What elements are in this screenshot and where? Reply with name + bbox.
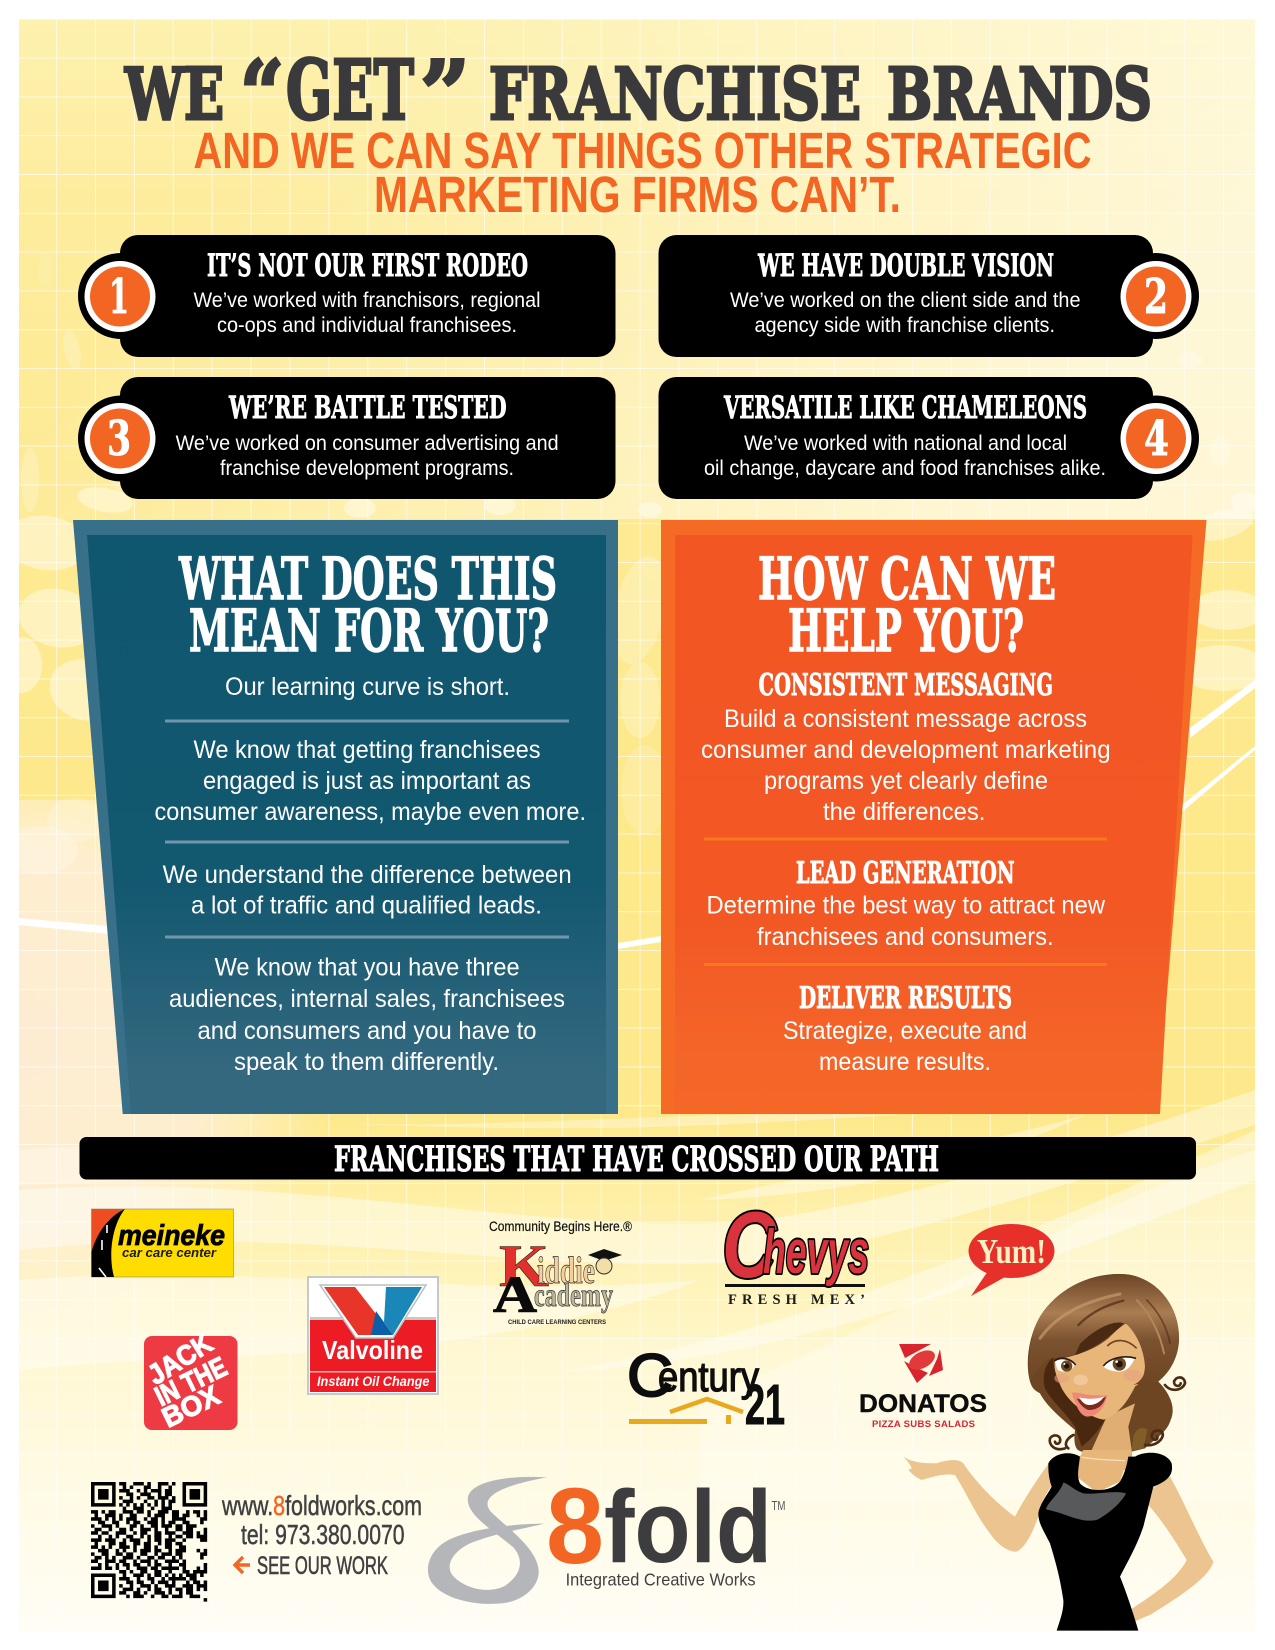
heading <box>178 545 557 665</box>
mouth <box>1072 1392 1107 1417</box>
heading: HELP YOU? <box>788 597 1024 665</box>
body text: We know that getting franchisees <box>194 736 540 764</box>
banner: franchises <box>80 1137 1196 1180</box>
panel: what does this mean for you <box>73 520 618 1114</box>
subtitle: MARKETING FIRMS CAN’T. <box>374 166 901 223</box>
logo: valvoline: Valvoline <box>322 1335 423 1365</box>
callout 3: 3 <box>107 411 131 467</box>
consistent messaging: CONSISTENT MESSAGING <box>758 667 1053 702</box>
body text: engaged is just as important as <box>203 767 531 795</box>
qr code <box>91 1482 207 1602</box>
logo: kiddie academy <box>489 1218 633 1326</box>
callout 1: 1 <box>109 269 129 325</box>
logo: kiddie academy: Community Begins Here.® <box>489 1218 633 1234</box>
logo: 8fold: Integrated Creative Works <box>566 1570 756 1590</box>
logo: kiddie academy: K <box>499 1233 549 1299</box>
deliver results: measure results. <box>819 1048 991 1076</box>
callout 1: IT’S NOT OUR FIRST RODEO <box>207 248 528 284</box>
logo: chevys <box>722 1192 869 1308</box>
logo: meineke: meineke <box>118 1220 225 1252</box>
contact details: www.8foldworks.com <box>221 1490 422 1521</box>
logo: jack in the box: BOX <box>157 1379 225 1434</box>
consistent messaging: Build a consistent message across <box>724 705 1087 733</box>
body <box>903 1450 1213 1631</box>
logo: yum: Yum! <box>977 1232 1046 1271</box>
logo: meineke: car care center <box>122 1246 217 1260</box>
left eye <box>1055 1359 1075 1371</box>
consistent messaging: the differences. <box>823 798 985 826</box>
lead generation: LEAD GENERATION <box>796 855 1015 890</box>
body text: consumer awareness, maybe even more. <box>154 798 586 826</box>
panel: how can we help you <box>661 520 1206 1114</box>
white streaks <box>19 680 1255 949</box>
logo: donatos: DONATOS <box>859 1390 987 1418</box>
logo: yum <box>968 1224 1054 1296</box>
deliver results <box>783 980 1027 1076</box>
deliver results: DELIVER RESULTS <box>799 980 1012 1015</box>
arms <box>903 1457 1053 1552</box>
heading: WHAT DOES THIS <box>178 545 557 613</box>
logo: kiddie academy: CHILD CARE LEARNING CENTERS <box>508 1319 607 1326</box>
callout 3 <box>78 377 616 499</box>
logo: century 21: C <box>627 1342 673 1409</box>
illustration: woman <box>903 1274 1213 1631</box>
callout 2: agency side with franchise clients. <box>754 313 1055 337</box>
body text: audiences, internal sales, franchisees <box>169 985 565 1013</box>
lower swooshes <box>19 1090 1255 1500</box>
logo: 8fold: TM <box>772 1498 786 1513</box>
heading: HOW CAN WE <box>758 545 1056 613</box>
body text: We know that you have three <box>215 954 520 982</box>
logo: 8fold: fold <box>604 1469 772 1584</box>
logo: donatos <box>859 1344 987 1430</box>
logo: jack in the box: IN THE <box>150 1351 232 1412</box>
logo: kiddie academy: A <box>493 1267 538 1324</box>
heading <box>758 545 1056 665</box>
logo: century 21: entury <box>658 1353 759 1400</box>
nose and cheeks <box>1073 1375 1088 1385</box>
body text: and consumers and you have to <box>198 1017 536 1045</box>
logo: valvoline: Instant Oil Change <box>317 1373 430 1389</box>
lead generation <box>706 855 1106 951</box>
dress <box>1038 1453 1172 1631</box>
logo: kiddie academy: iddie <box>537 1250 595 1292</box>
lead generation: Determine the best way to attract new <box>706 892 1106 920</box>
callout 2: We’ve worked on the client side and the <box>730 288 1080 312</box>
logo: valvoline <box>308 1277 438 1394</box>
title: ” <box>420 41 470 147</box>
callout 1: co-ops and individual franchisees. <box>217 313 517 337</box>
callout 4: 4 <box>1144 411 1169 467</box>
title: FRANCHISE <box>489 52 861 136</box>
body text: a lot of traffic and qualified leads. <box>191 892 542 920</box>
logo: 8fold: 8 <box>546 1465 604 1586</box>
contact details: SEE OUR WORK <box>257 1552 388 1580</box>
body text: We understand the difference between <box>163 861 572 889</box>
curls <box>1050 1377 1185 1449</box>
callout 3: WE’RE BATTLE TESTED <box>228 390 507 426</box>
logo: kiddie academy: cademy <box>534 1278 613 1314</box>
consistent messaging: programs yet clearly define <box>764 767 1048 795</box>
logo: chevys: C <box>722 1192 777 1297</box>
banner: franchises: FRANCHISES THAT HAVE CROSSED OUR PATH <box>334 1139 939 1180</box>
head <box>1028 1274 1185 1470</box>
logo: century 21: 21 <box>745 1373 785 1437</box>
contact details <box>221 1490 422 1580</box>
dress highlight <box>1046 1483 1126 1521</box>
logo: chevys: FRESH MEX’ <box>728 1292 865 1308</box>
title: “ <box>240 41 284 147</box>
subtitle <box>194 122 1092 223</box>
title: WE <box>124 52 224 136</box>
callout 2: 2 <box>1144 269 1168 325</box>
callout 3: franchise development programs. <box>220 456 514 480</box>
callout 3: We’ve worked on consumer advertising and <box>176 431 559 455</box>
title: BRANDS <box>887 52 1152 136</box>
title <box>124 41 1152 147</box>
callout 2 <box>658 235 1199 357</box>
callout 1: We’ve worked with franchisors, regional <box>194 288 540 312</box>
heading: MEAN FOR YOU? <box>189 597 549 665</box>
logo: meineke <box>92 1209 234 1277</box>
callout 4: oil change, daycare and food franchises alike. <box>704 456 1106 480</box>
lead generation: franchisees and consumers. <box>757 923 1054 951</box>
deliver results: Strategize, execute and <box>783 1017 1027 1045</box>
logo: jack in the box: JACK <box>142 1327 218 1391</box>
callout 2: WE HAVE DOUBLE VISION <box>757 248 1054 284</box>
logo: century 21 <box>627 1342 785 1437</box>
contact details: tel: 973.380.0070 <box>241 1519 404 1550</box>
callout 1 <box>78 235 616 357</box>
consistent messaging: consumer and development marketing <box>701 736 1111 764</box>
consistent messaging <box>701 667 1111 826</box>
callout 4: We’ve worked with national and local <box>744 431 1067 455</box>
body text: speak to them differently. <box>234 1048 499 1076</box>
callout 4 <box>658 377 1199 499</box>
right eye <box>1103 1357 1135 1372</box>
brow <box>1107 1341 1137 1348</box>
logo: jack in the box <box>142 1327 238 1434</box>
title: GET <box>286 43 414 139</box>
body text <box>154 673 586 1076</box>
logo: 8fold <box>428 1465 786 1604</box>
logo: chevys: hevys <box>763 1218 869 1287</box>
logo: donatos: PIZZA SUBS SALADS <box>872 1419 975 1430</box>
body text: Our learning curve is short. <box>225 673 510 701</box>
